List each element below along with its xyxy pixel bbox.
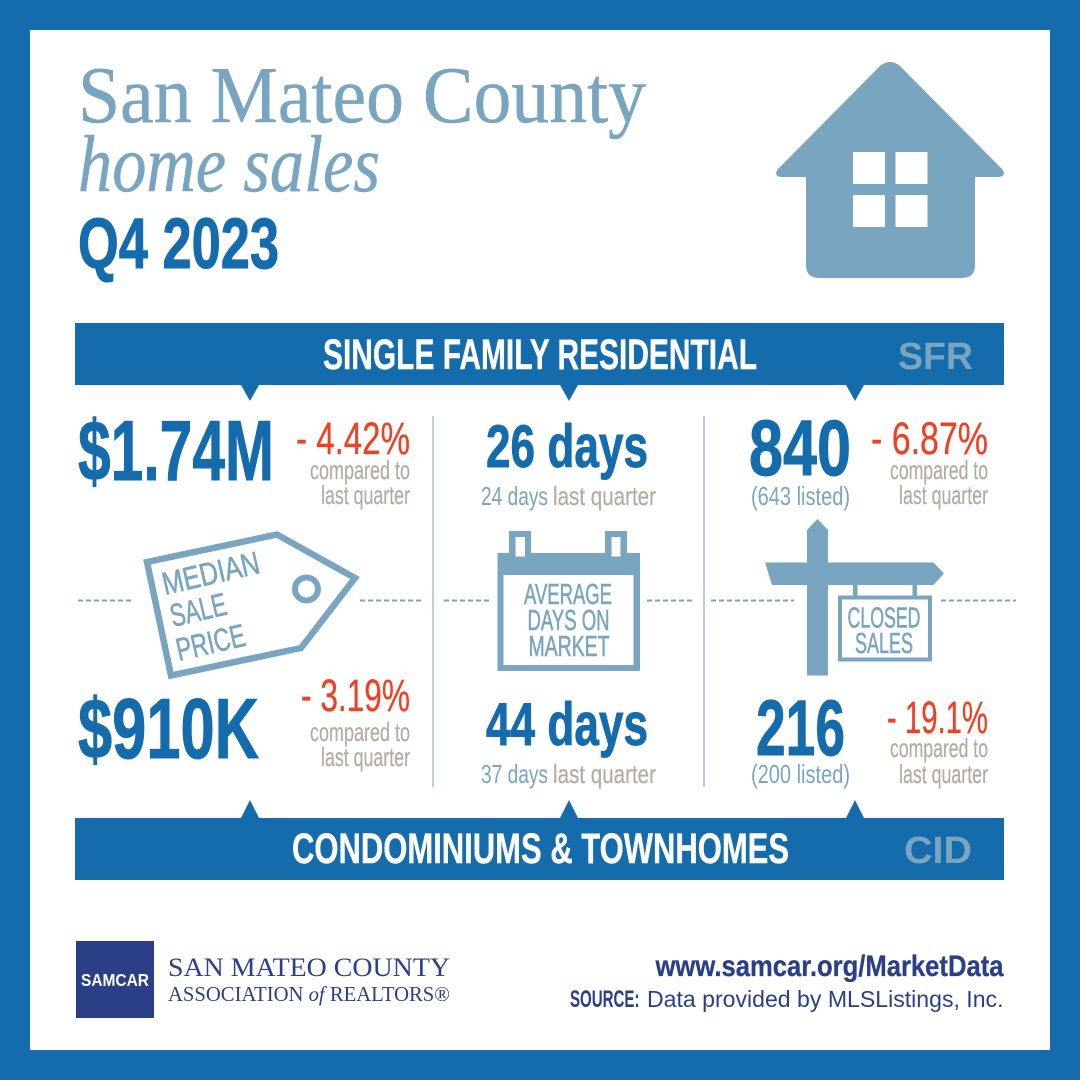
stat: SFR average days on market: 24 days [481, 481, 548, 511]
icon: price tag: PRICE [172, 617, 249, 668]
icon: price tag: MEDIAN [158, 544, 263, 602]
banner: single family residential [75, 323, 1004, 401]
stat: CID closed sales: last quarter [899, 759, 988, 789]
stat: CID closed sales: (200 listed) [751, 759, 850, 789]
icon: price tag [147, 534, 355, 676]
stat: CID average days on market [481, 691, 656, 789]
stat: CID closed sales: 216 [756, 683, 845, 772]
logo: SAMCAR: SAMCAR [81, 970, 149, 990]
stat: SFR closed sales [749, 403, 988, 511]
logo: SAMCAR: ASSOCIATION of REALTORS® [168, 982, 450, 1006]
icon: calendar: DAYS ON [528, 605, 610, 637]
stat: CID average days on market: 37 days [481, 759, 548, 789]
dashed guide lines [78, 600, 1016, 602]
stat: SFR median sale price: compared to [310, 455, 410, 485]
icon: closed sales signpost: CLOSED [848, 602, 920, 634]
icon: calendar [498, 531, 640, 671]
stat: SFR average days on market: 26 days [486, 413, 648, 480]
title: Q4 2023 [78, 205, 279, 284]
stat: CID median sale price: compared to [310, 717, 410, 747]
icon: price tag: SALE [166, 586, 230, 634]
banner: condominiums and townhomes: CID [904, 830, 972, 872]
column dividers [433, 416, 704, 787]
stat: SFR median sale price: - 4.42% [296, 413, 410, 464]
banner: single family residential: SINGLE FAMILY RESIDENTIAL [323, 331, 757, 379]
title: San Mateo County [78, 52, 646, 140]
source and website [570, 950, 1004, 1013]
source and website: www.samcar.org/MarketData [655, 950, 1004, 983]
stat: SFR closed sales: (643 listed) [751, 481, 850, 511]
icon: calendar: AVERAGE [524, 579, 612, 611]
stat: CID closed sales: - 19.1% [887, 692, 988, 743]
icon: house [776, 62, 1004, 278]
banner: single family residential: SFR [898, 336, 973, 378]
source and website: Data provided by MLSListings, Inc. [647, 986, 1004, 1012]
stat: SFR closed sales: last quarter [899, 480, 988, 510]
stat: SFR closed sales: - 6.87% [871, 413, 988, 464]
stat: SFR closed sales: compared to [890, 455, 988, 485]
source and website: SOURCE: [570, 986, 640, 1013]
banner: condominiums and townhomes: CONDOMINIUMS & TOWNHOMES [292, 825, 789, 873]
stat: CID closed sales [751, 683, 988, 789]
stat: CID median sale price [78, 670, 410, 777]
stat: SFR average days on market: last quarter [553, 481, 656, 511]
title: home sales [78, 121, 380, 209]
stat: CID average days on market: 44 days [486, 691, 648, 758]
stat: CID closed sales: compared to [890, 733, 988, 763]
stat: CID median sale price: - 3.19% [301, 670, 410, 721]
banner: condominiums and townhomes [75, 800, 1004, 880]
stat: CID average days on market: last quarter [553, 759, 656, 789]
stat: SFR closed sales: 840 [749, 403, 851, 492]
stat: SFR median sale price: last quarter [321, 480, 410, 510]
logo: SAMCAR: SAN MATEO COUNTY [168, 952, 450, 982]
stat: CID median sale price: $910K [78, 682, 259, 777]
stat: SFR average days on market [481, 413, 656, 511]
stat: CID median sale price: last quarter [321, 742, 410, 772]
icon: closed sales signpost: SALES [855, 628, 913, 660]
icon: closed sales signpost [765, 519, 944, 676]
logo: SAMCAR [76, 941, 450, 1018]
stat: SFR median sale price: $1.74M [78, 404, 274, 499]
title [78, 52, 646, 284]
icon: calendar: MARKET [528, 631, 610, 663]
